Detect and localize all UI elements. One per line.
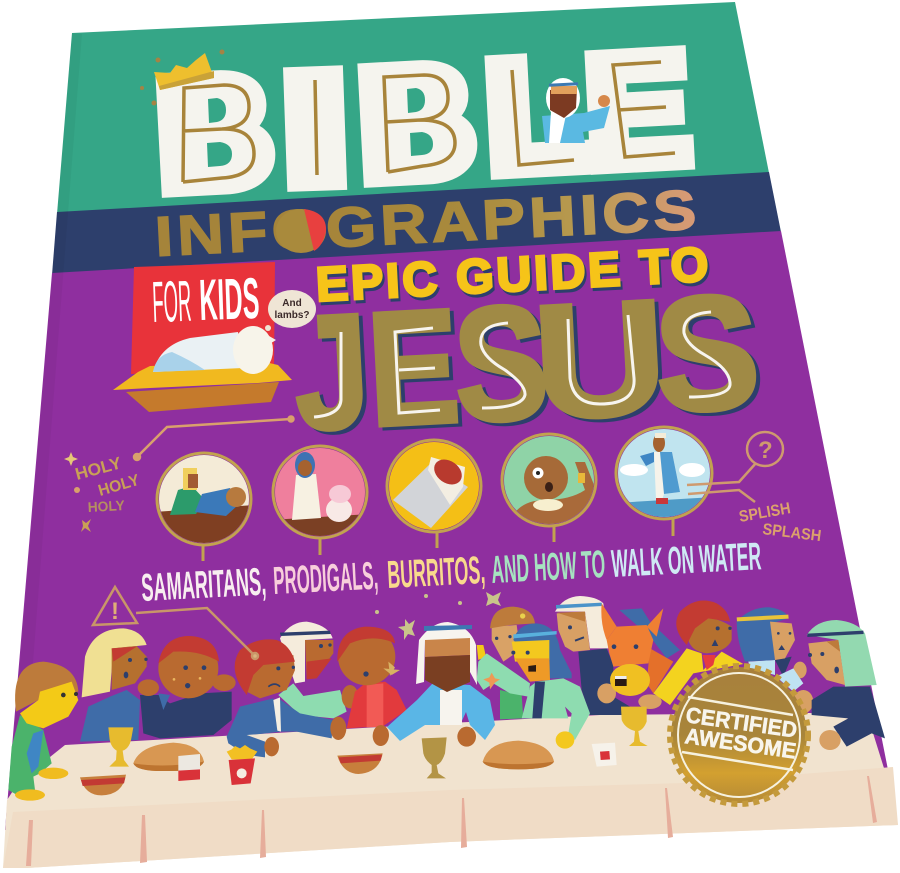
icon: pie chart O <box>276 209 326 253</box>
seal text: AWESOME <box>683 723 798 764</box>
gold letters: S <box>450 271 552 455</box>
folds <box>26 776 877 866</box>
icon: bowl centre <box>337 753 383 774</box>
stem <box>318 538 322 555</box>
text: SPLISH SPLASH: SPLISH <box>738 500 792 526</box>
B counters <box>192 78 450 180</box>
circle: Prodigal <box>270 445 370 555</box>
illustration: left half of last supper <box>8 622 407 801</box>
figure: blonde woman <box>80 628 148 742</box>
figure: white headdress man right <box>555 596 630 715</box>
subtitle: AND HOW TO <box>490 543 606 592</box>
icon: bread left <box>133 743 204 771</box>
red panel <box>131 262 275 374</box>
figure: blue-scarf man <box>737 607 807 692</box>
callout: warning triangle: ! <box>111 598 119 625</box>
callout: question mark <box>687 432 783 502</box>
title: BIBLE: E <box>582 21 694 199</box>
gold letters: J <box>290 280 373 463</box>
subtitle: SAMARITANS, <box>140 561 267 610</box>
figure: kid <box>8 662 78 801</box>
icon: fries <box>227 745 257 785</box>
stem <box>436 532 438 548</box>
badge: certified awesome seal <box>670 666 808 804</box>
white inline strokes <box>314 312 730 417</box>
speech bubble <box>265 290 316 331</box>
title: BIBLE: B <box>153 43 277 222</box>
figure: ginger man <box>477 607 535 719</box>
panel: navy band <box>52 172 781 275</box>
icon: bowl left <box>80 775 126 795</box>
speech bubble: And <box>282 298 302 309</box>
shadow: S <box>655 264 767 448</box>
icon: bread right <box>483 741 554 769</box>
stem <box>552 526 556 542</box>
lamb <box>153 326 276 374</box>
icon: gold cup left <box>108 727 133 767</box>
figure: yellow-dress person <box>638 601 743 709</box>
title: BIBLE: B <box>355 33 479 212</box>
table items left <box>80 726 447 795</box>
gold letters: S <box>651 261 763 445</box>
connector: JESUS to HOLY <box>134 416 294 460</box>
shadow <box>294 264 767 466</box>
text: HOLY HOLY HOLY: HOLY <box>96 472 142 500</box>
callout: question mark: ? <box>758 437 773 464</box>
heading: JESUS <box>290 261 767 466</box>
shadow: E <box>368 279 467 462</box>
text: SPLISH SPLASH <box>738 500 822 545</box>
text: HOLY HOLY HOLY: HOLY <box>73 453 124 484</box>
badge: FOR KIDS with lamb <box>113 262 316 412</box>
heading: EPIC GUIDE TO: EPIC GUIDE TO <box>317 241 715 315</box>
subtitle <box>140 535 762 610</box>
callout: warning triangle <box>93 587 258 659</box>
text: SPLISH SPLASH: SPLASH <box>762 521 822 545</box>
hay crib <box>113 362 292 412</box>
icon: goblet <box>422 737 447 778</box>
text: HOLY HOLY HOLY <box>64 452 142 532</box>
title: BIBLE: I <box>280 41 350 216</box>
figure: Jesus <box>373 622 495 745</box>
panel: purple background <box>5 231 892 830</box>
figure: green-headdress man <box>793 620 885 750</box>
icon: gold cup right <box>621 707 648 746</box>
title: BIBLE: L <box>482 26 591 204</box>
icon: crown <box>140 50 224 106</box>
decorative sparkles <box>375 592 501 640</box>
seal ribbon lines <box>682 697 793 770</box>
text: HOLY HOLY HOLY: HOLY <box>87 497 126 515</box>
figure: white headdress man <box>278 622 358 718</box>
seal text <box>683 702 799 764</box>
icon: waving man in BIBLE <box>542 78 610 143</box>
circle: Samaritan <box>155 450 255 561</box>
icon: takeout box <box>592 743 617 767</box>
seal text: CERTIFIED <box>684 702 799 743</box>
title: BIBLE <box>153 21 694 222</box>
figure: yellow-faced man <box>511 623 590 749</box>
FOR KIDS text: FOR <box>151 269 192 335</box>
tablecloth <box>3 713 898 868</box>
figure: donkey <box>601 603 680 696</box>
figure: freckled man <box>138 636 236 738</box>
speech bubble: lambs? <box>274 310 310 321</box>
subtitle: BURRITOS, <box>386 549 486 597</box>
circle: walking on water <box>615 425 715 536</box>
circle: surprised boy <box>500 432 600 542</box>
heading: EPIC GUIDE TO: EPIC GUIDE TO <box>315 238 713 312</box>
figure: red-shirt man <box>337 627 407 728</box>
right hand of Jesus <box>457 727 476 747</box>
gold inline strokes <box>183 62 675 182</box>
icon: left hand of Jesus <box>373 726 389 746</box>
panel: green band <box>57 2 769 214</box>
gold letters: U <box>530 266 670 452</box>
icon: soda cup <box>178 754 200 781</box>
circle: burrito <box>385 438 485 548</box>
badge: FOR KIDS with lamb: KIDS <box>198 266 260 333</box>
gold letters <box>290 261 763 463</box>
shadow: S <box>454 274 556 458</box>
shadow: J <box>294 283 377 466</box>
subtitle: PRODIGALS, <box>272 555 379 603</box>
spine shading <box>3 33 82 868</box>
figure: red-haired woman <box>227 639 346 757</box>
stem <box>202 545 204 561</box>
heading: INFOGRAPHICS: INFOGRAPHICS <box>153 177 702 268</box>
illustration: right half of last supper <box>457 596 885 769</box>
shadow: U <box>534 269 674 455</box>
stem <box>672 519 674 536</box>
gold letters: E <box>364 276 463 459</box>
